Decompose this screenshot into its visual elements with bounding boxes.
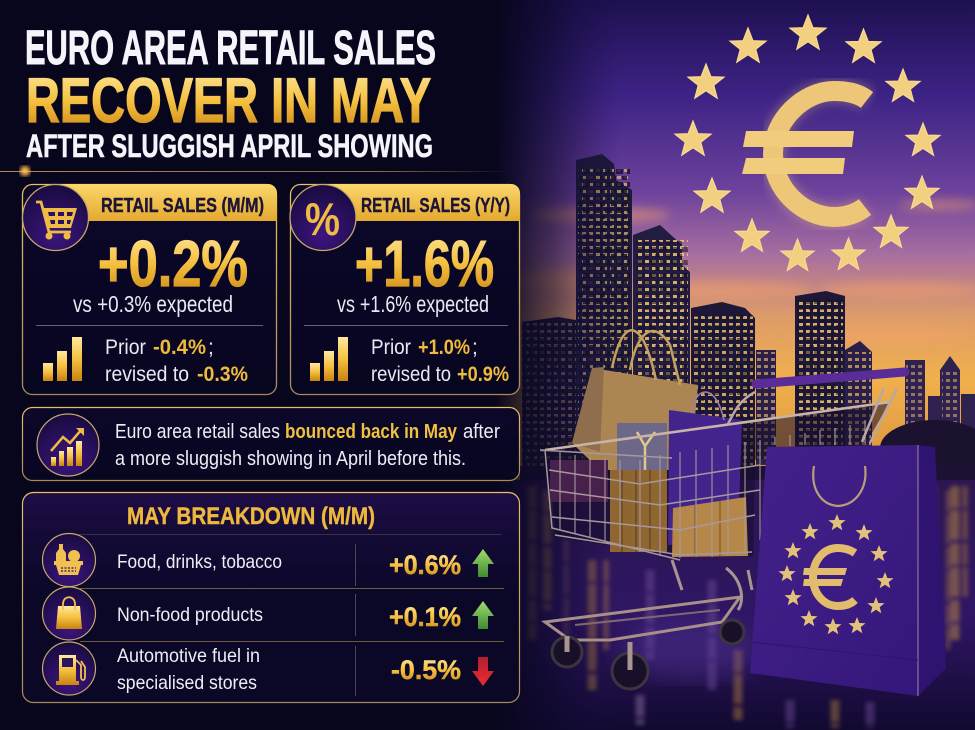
panel: may breakdown bbox=[22, 492, 520, 702]
row: non-food: Non-food products bbox=[117, 604, 263, 626]
header band m/m bbox=[60, 184, 277, 221]
header band y/y bbox=[325, 184, 520, 221]
panel: retail sales y/y: vs +1.6% expected bbox=[337, 291, 489, 317]
euro ring of stars bbox=[675, 15, 940, 270]
panel: retail sales m/m: RETAIL SALES (M/M) bbox=[101, 194, 264, 217]
breakdown heading: MAY BREAKDOWN (M/M) bbox=[127, 503, 375, 530]
row: fuel: specialised stores bbox=[117, 672, 257, 694]
row: fuel bbox=[42, 642, 494, 695]
row: fuel: Automotive fuel in bbox=[117, 645, 260, 667]
title bbox=[25, 22, 436, 164]
icon: fuel pump bbox=[42, 642, 96, 695]
prior y/y: revised to bbox=[371, 363, 451, 386]
row: fuel: -0.5% bbox=[391, 655, 461, 685]
left dark fade bbox=[0, 0, 620, 730]
summary text: after bbox=[463, 421, 500, 443]
prior m/m bbox=[105, 336, 248, 386]
panel: retail sales y/y bbox=[290, 184, 520, 394]
shopping cart scene bbox=[540, 330, 905, 689]
icon: growth chart bbox=[37, 414, 99, 476]
icon: shopping bag bbox=[42, 587, 96, 640]
panel: retail sales m/m bbox=[22, 184, 277, 394]
panel: retail sales y/y: RETAIL SALES (Y/Y) bbox=[361, 194, 510, 217]
arrow: up bbox=[472, 549, 494, 577]
prior y/y bbox=[371, 336, 509, 386]
row: food bbox=[42, 534, 494, 586]
euro shopping bag bbox=[750, 445, 946, 696]
prior y/y: ; bbox=[472, 336, 478, 359]
arrow: up bbox=[472, 601, 494, 629]
cart handle bbox=[728, 372, 905, 443]
buildings bbox=[522, 154, 975, 470]
title: RECOVER IN MAY bbox=[26, 66, 431, 136]
prior y/y: +1.0% bbox=[418, 336, 470, 359]
prior y/y: Prior bbox=[371, 336, 411, 359]
icon: percent: % bbox=[305, 193, 340, 245]
prior m/m: revised to bbox=[105, 363, 189, 386]
water reflections bbox=[500, 480, 975, 730]
prior m/m: Prior bbox=[105, 336, 146, 359]
icon: shopping cart bbox=[22, 184, 88, 250]
title: AFTER SLUGGISH APRIL SHOWING bbox=[26, 128, 433, 164]
row: food: +0.6% bbox=[389, 550, 461, 580]
prior m/m: -0.3% bbox=[197, 363, 248, 386]
cart wire basket bbox=[540, 402, 890, 560]
prior y/y: +0.9% bbox=[457, 363, 509, 386]
summary text: a more sluggish showing in April before this. bbox=[115, 448, 466, 470]
panel: retail sales m/m: vs +0.3% expected bbox=[73, 291, 233, 317]
row: non-food: +0.1% bbox=[389, 602, 461, 632]
arrow: down bbox=[472, 657, 494, 686]
prior m/m: ; bbox=[208, 336, 214, 359]
summary text: Euro area retail sales bbox=[115, 421, 280, 443]
icon: percent bbox=[290, 184, 356, 250]
value +1.6%: +1.6% bbox=[355, 227, 494, 300]
icon: bars bbox=[310, 337, 348, 381]
icon: food basket bbox=[42, 534, 96, 586]
title: EURO AREA RETAIL SALES bbox=[25, 22, 436, 75]
value +0.2%: +0.2% bbox=[98, 227, 248, 300]
summary text bbox=[115, 421, 500, 470]
bags in cart bbox=[550, 330, 748, 557]
row: non-food bbox=[42, 587, 494, 640]
summary text: bounced back in May bbox=[285, 421, 458, 443]
callout: summary bbox=[22, 408, 520, 480]
prior m/m: -0.4% bbox=[153, 336, 206, 359]
euro symbol bbox=[742, 91, 867, 217]
cart base and wheels bbox=[545, 560, 752, 689]
row: food: Food, drinks, tobacco bbox=[117, 551, 282, 573]
icon: bars bbox=[43, 337, 82, 381]
